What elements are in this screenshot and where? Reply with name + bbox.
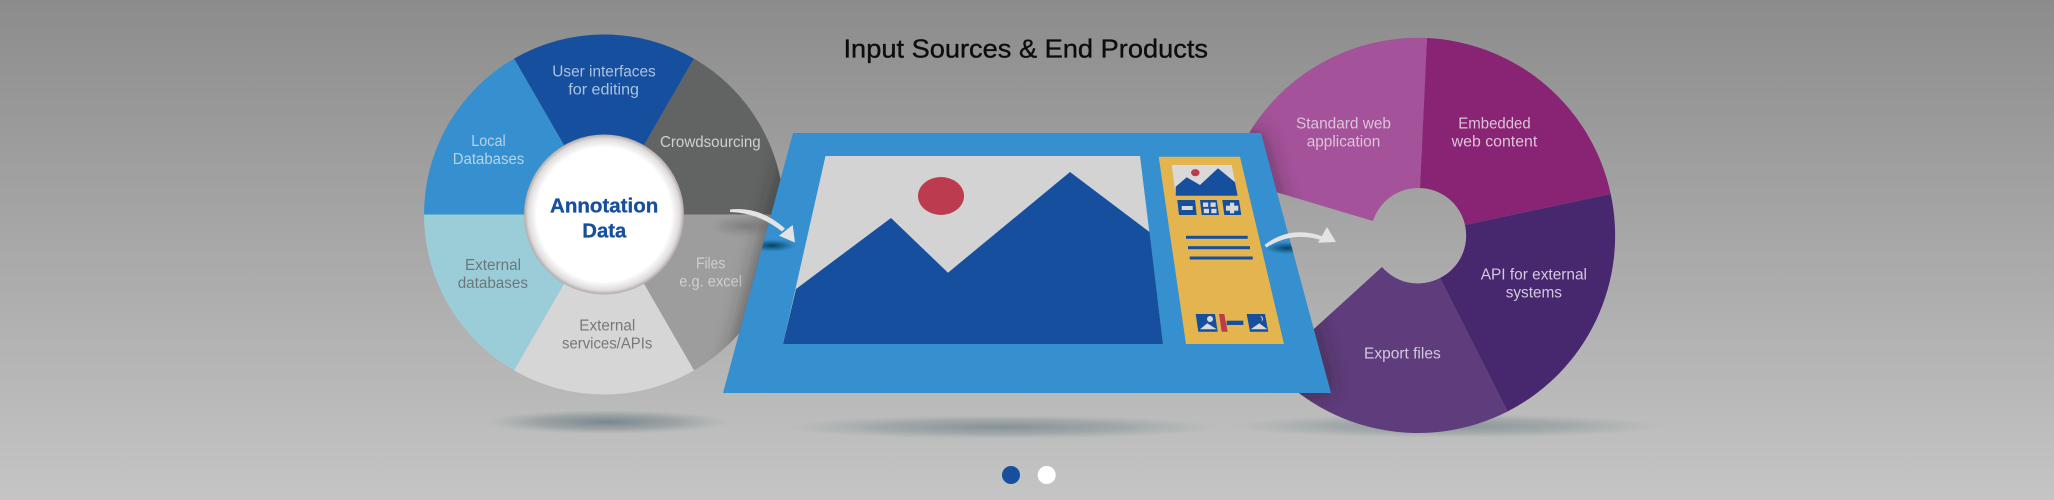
segment: external services: services/APIs <box>562 336 653 353</box>
segment: external databases: databases <box>458 275 528 292</box>
sidebar <box>1159 157 1284 344</box>
segment: files: e.g. excel <box>679 273 742 290</box>
main image <box>783 156 1163 344</box>
segment: external databases <box>424 214 604 370</box>
segment: crowdsourcing <box>604 59 784 214</box>
segment: export files <box>1271 267 1508 433</box>
viewer frame <box>723 133 1331 393</box>
icon: zoom out <box>1177 200 1197 215</box>
ground shadow: left wheel <box>487 410 727 434</box>
segment: API for external systems <box>1440 194 1615 412</box>
inactive dot <box>1038 466 1056 484</box>
segment: embedded web content: web content <box>1451 134 1538 151</box>
segment: standard web application: application <box>1307 134 1380 151</box>
segment: user interfaces for editing <box>514 34 694 214</box>
panel shadow on left wheel <box>720 158 780 352</box>
segment: user interfaces for editing: User interfaces <box>552 64 656 81</box>
segment: crowdsourcing: Crowdsourcing <box>660 134 761 151</box>
segment: files <box>604 214 784 370</box>
segment: standard web application: Standard web <box>1296 116 1391 133</box>
text lines <box>1186 236 1253 260</box>
arrow shadow: left <box>762 240 794 251</box>
arrow shadow: right <box>1266 242 1294 254</box>
icon: before image <box>1196 314 1218 332</box>
segment: export files: Export files <box>1364 346 1441 363</box>
segment: standard web application <box>1229 38 1427 221</box>
segment: API for external systems: systems <box>1506 284 1562 301</box>
ground shadow: right wheel <box>1232 414 1662 438</box>
thumbnail image <box>1172 165 1238 196</box>
icon: after image <box>1247 314 1268 332</box>
segment: local databases <box>424 59 604 214</box>
sun <box>918 177 964 215</box>
icon: zoom in <box>1222 200 1241 215</box>
title: Input Sources & End Products <box>844 34 1208 64</box>
ground shadow: center panel <box>787 415 1217 439</box>
panel: input sources wheel <box>424 34 780 394</box>
center hub: annotation data <box>524 134 684 294</box>
segment: API for external systems: API for external <box>1481 266 1587 283</box>
segment: embedded web content: Embedded <box>1458 116 1531 133</box>
icon: fit to screen <box>1200 200 1219 215</box>
segment: external services: External <box>579 318 635 335</box>
panel: end products wheel <box>1249 38 1616 433</box>
active dot <box>1002 466 1020 484</box>
center hub: annotation data: Annotation <box>550 194 658 217</box>
mountains <box>783 172 1163 344</box>
segment: external databases: External <box>465 257 521 274</box>
segment: external services <box>514 214 694 395</box>
panel shadow on right wheel <box>1249 122 1339 404</box>
icon: comparison slider <box>1219 314 1243 332</box>
segment: user interfaces for editing: for editing <box>568 82 639 99</box>
panel: annotated image viewer <box>723 133 1331 393</box>
segment: local databases: Local <box>471 133 506 150</box>
segment: embedded web content <box>1420 38 1611 225</box>
segment: local databases: Databases <box>453 151 525 168</box>
segment: files: Files <box>696 255 726 272</box>
pagination dots <box>1002 466 1056 484</box>
arrow: input sources into viewer <box>730 209 795 242</box>
center hub: annotation data: Data <box>582 219 627 242</box>
arrow: viewer to end products <box>1264 227 1336 248</box>
